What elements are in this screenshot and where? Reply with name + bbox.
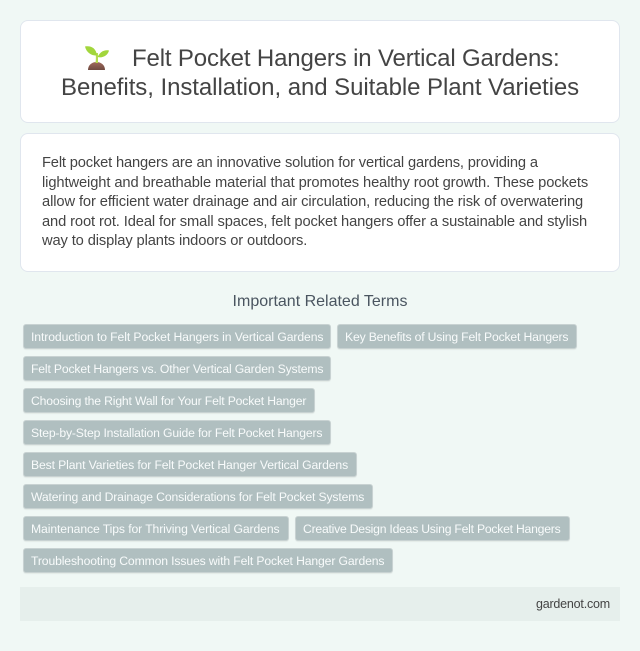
footer credit: gardenot.com bbox=[536, 597, 610, 611]
tag bbox=[295, 516, 570, 541]
tag bbox=[23, 452, 357, 477]
title bbox=[61, 45, 579, 101]
tag: Key Benefits of Using Felt Pocket Hangers bbox=[345, 330, 568, 344]
tag: Choosing the Right Wall for Your Felt Pocket Hanger bbox=[31, 394, 306, 408]
tag: Best Plant Varieties for Felt Pocket Hanger Vertical Gardens bbox=[31, 458, 348, 472]
tag: Watering and Drainage Considerations for Felt Pocket Systems bbox=[31, 490, 364, 504]
tag bbox=[23, 388, 315, 413]
title: Felt Pocket Hangers in Vertical Gardens: bbox=[132, 45, 560, 72]
text block: description: way to display plants indoors or outdoors. bbox=[42, 233, 307, 249]
tag: Troubleshooting Common Issues with Felt Pocket Hanger Gardens bbox=[31, 554, 384, 568]
tag bbox=[23, 548, 393, 573]
tag bbox=[23, 356, 331, 381]
tag: Maintenance Tips for Thriving Vertical Gardens bbox=[31, 522, 280, 536]
text block: description: allow for efficient water drainage and air circulation, reducing the risk of overwatering bbox=[42, 194, 583, 210]
tag: Felt Pocket Hangers vs. Other Vertical Garden Systems bbox=[31, 362, 323, 376]
text block: description bbox=[42, 155, 588, 249]
footer bbox=[20, 587, 620, 621]
icon: seedling bbox=[85, 46, 109, 70]
tag: Step-by-Step Installation Guide for Felt Pocket Hangers bbox=[31, 426, 322, 440]
tag list bbox=[23, 324, 577, 574]
tag: Introduction to Felt Pocket Hangers in Vertical Gardens bbox=[31, 330, 323, 344]
tag: Creative Design Ideas Using Felt Pocket Hangers bbox=[303, 522, 560, 536]
text block: description: Felt pocket hangers are an innovative solution for vertical gardens, providing a bbox=[42, 155, 538, 171]
panel: title card bbox=[20, 20, 620, 123]
panel: description bbox=[20, 133, 620, 272]
heading: important related terms: Important Related Terms bbox=[233, 293, 407, 310]
tag bbox=[23, 324, 331, 349]
tag bbox=[337, 324, 577, 349]
tag bbox=[23, 516, 289, 541]
tag bbox=[23, 484, 373, 509]
text block: description: and root rot. Ideal for small spaces, felt pocket hangers offer a sustainable and stylish bbox=[42, 214, 587, 230]
tag bbox=[23, 420, 331, 445]
text block: description: lightweight and breathable material that promotes healthy root growth. These pockets bbox=[42, 175, 588, 191]
title: Benefits, Installation, and Suitable Plant Varieties bbox=[61, 74, 579, 101]
